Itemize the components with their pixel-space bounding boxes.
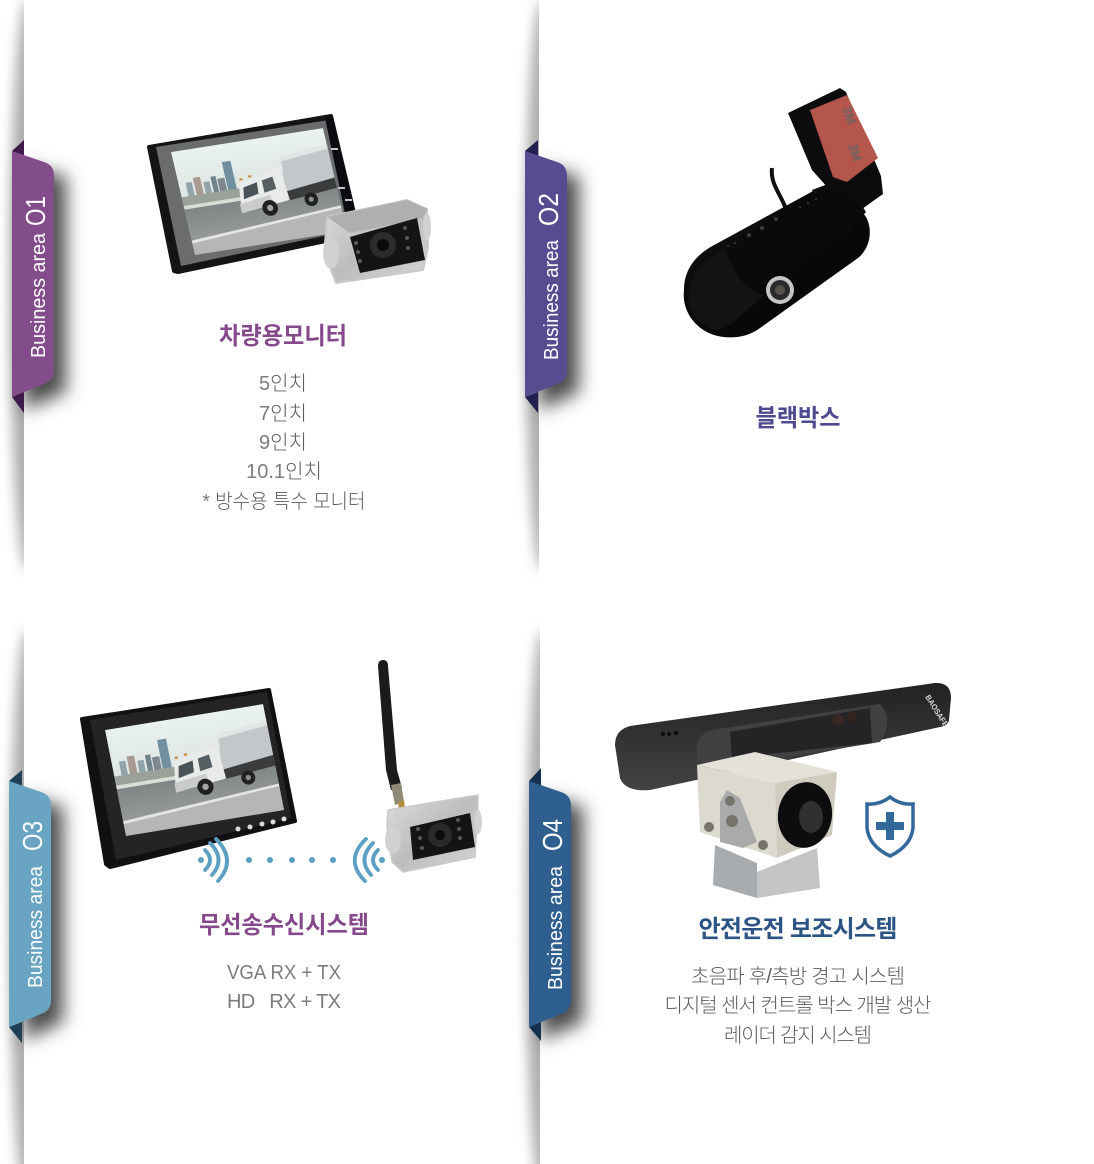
product image: black box dashcam: 3M	[845, 141, 865, 163]
side shading 03	[2, 628, 24, 1164]
product image: wireless camera with antenna	[378, 660, 482, 872]
panel: business area 02	[525, 0, 883, 570]
ribbon 02: Business area	[541, 239, 563, 360]
panel: business area 04	[526, 630, 951, 1164]
ribbon 03: O3	[17, 821, 48, 851]
text block 01: 10.1인치	[246, 460, 322, 483]
text block 03	[227, 962, 341, 1013]
text block 04: 초음파 후/측방 경고 시스템	[691, 965, 905, 988]
ribbon 01: O1	[20, 196, 51, 226]
panel: business area 01	[10, 0, 431, 570]
side shading 01	[2, 0, 24, 572]
text block 01: 5인치	[259, 372, 307, 395]
heading 02: 블랙박스	[756, 405, 840, 432]
product image: black box dashcam: 3M	[839, 104, 859, 126]
heading 03: 무선송수신시스템	[199, 912, 369, 939]
ribbon 04: Business area	[545, 865, 567, 990]
side shading 02	[518, 0, 539, 572]
product image: driver assist unit and sensor	[615, 683, 951, 898]
product image: driver assist unit and sensor: BAOSAFE	[923, 693, 950, 729]
ribbon 02	[525, 140, 579, 413]
ribbon 03: Business area	[25, 865, 47, 988]
ribbon 01	[12, 140, 66, 413]
panel: business area 03	[9, 630, 482, 1164]
icon: wireless signal between monitor and camera	[198, 839, 385, 881]
ribbon 01: Business area	[28, 232, 50, 358]
product image: vehicle monitor and camera	[149, 116, 431, 283]
text block 04: 레이더 감지 시스템	[724, 1024, 872, 1047]
icon: safety shield with plus	[867, 797, 913, 856]
heading 01: 차량용모니터	[219, 323, 347, 350]
text block 01	[202, 372, 366, 513]
text block 01: * 방수용 특수 모니터	[202, 490, 366, 513]
heading 04: 안전운전 보조시스템	[698, 916, 898, 943]
text block 01: 9인치	[259, 431, 307, 454]
text block 01: 7인치	[259, 402, 307, 425]
text block 04: 디지털 센서 컨트롤 박스 개발 생산	[664, 994, 932, 1017]
ribbon 03	[9, 770, 63, 1043]
ribbon 02: O2	[533, 193, 564, 226]
ribbon 04: O4	[537, 819, 568, 851]
text block 04	[664, 965, 932, 1047]
product image: wireless monitor	[82, 690, 295, 867]
text block 03: HD RX + TX	[227, 991, 341, 1013]
ribbon 04	[529, 768, 583, 1041]
text block 03: VGA RX + TX	[227, 962, 341, 984]
product image: black box dashcam	[684, 88, 883, 337]
side shading 04	[518, 628, 540, 1164]
